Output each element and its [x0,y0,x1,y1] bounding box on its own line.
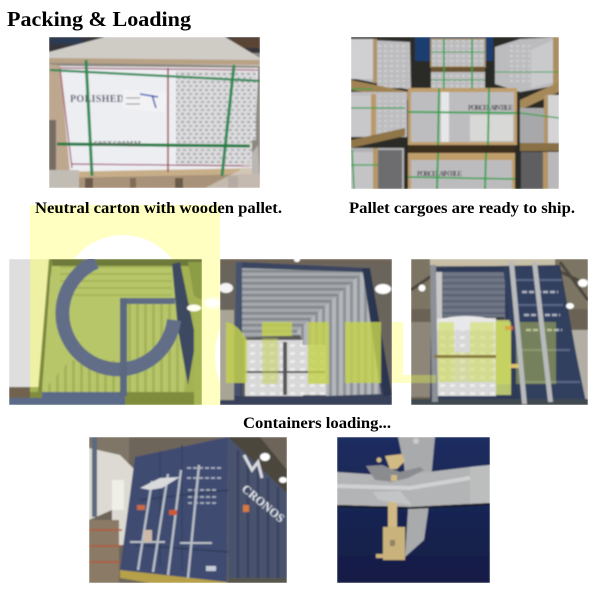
photo: empty container with watermark tint [9,259,202,405]
photo: stacked pallet cargoes [351,37,559,189]
photo: palletised carton wrapped in film: POLISHED [70,94,124,105]
photo: container interior with cargo [220,259,392,405]
photo: closed blue shipping container [89,437,288,583]
photo: container door lock close-up [337,437,490,583]
watermark letter tint [411,322,556,384]
caption: containers loading: Containers loading... [243,415,391,432]
photo: palletised carton wrapped in film: 600X600MM [94,139,141,148]
photo: palletised carton wrapped in film [49,37,260,188]
photo: stacked pallet cargoes: PORCELAIN TILE [417,170,462,178]
watermark ring [62,262,174,369]
photo: container half loaded, door open [411,259,588,405]
photo: closed blue shipping container: CRONOS [239,482,288,526]
photo: stacked pallet cargoes: PORCELAIN TILE [468,104,513,112]
caption: pallet cargoes: Pallet cargoes are ready to ship. [349,200,575,217]
caption: neutral carton: Neutral carton with wooden pallet. [35,200,282,217]
watermark letter tint [226,322,381,384]
watermark: pale yellow block behind photos [30,205,411,405]
title: Packing & Loading [7,7,192,31]
